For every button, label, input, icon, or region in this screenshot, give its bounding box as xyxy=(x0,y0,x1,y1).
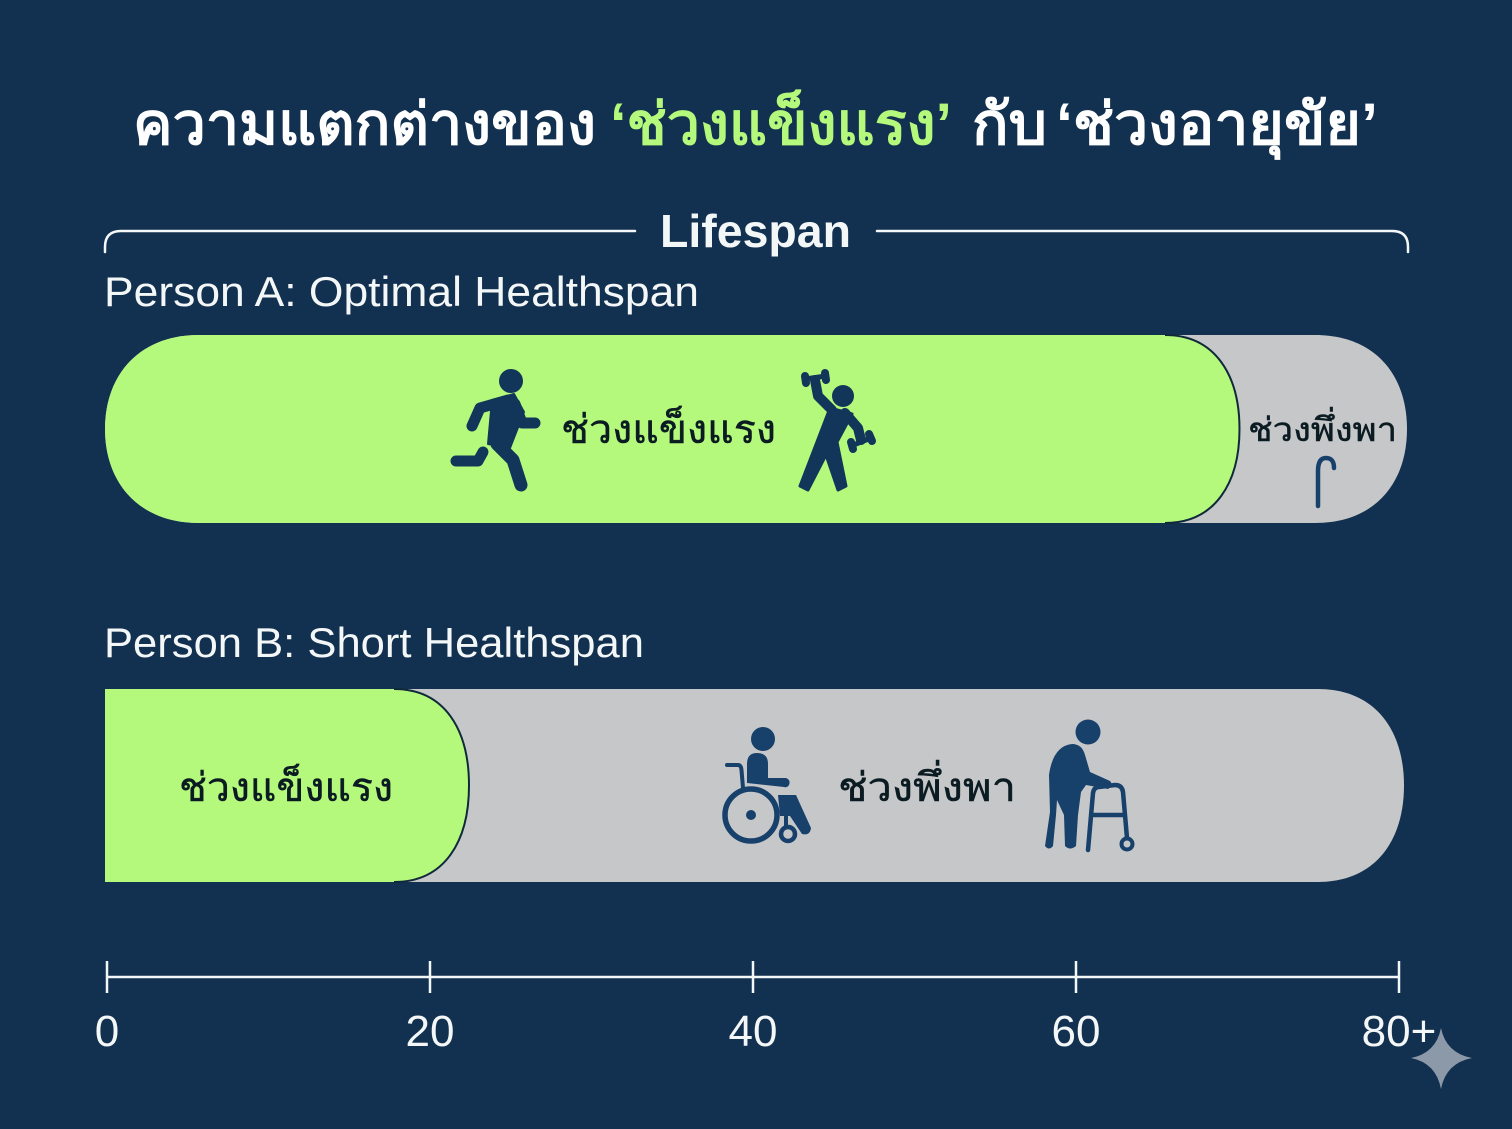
icon: person lifting dumbbells xyxy=(800,373,872,490)
axis label 80+: 80+ xyxy=(1362,1007,1436,1056)
age axis xyxy=(95,961,1436,1056)
panel: person B bar xyxy=(105,689,1404,882)
lifespan bracket: Lifespan xyxy=(660,205,851,257)
title: กับ xyxy=(972,92,1047,157)
icon: sparkle watermark xyxy=(1411,1028,1472,1089)
axis label 20: 20 xyxy=(406,1007,454,1056)
healthspan segment xyxy=(105,335,1240,523)
axis label 40: 40 xyxy=(729,1007,777,1056)
title xyxy=(133,89,1378,161)
icon: person with walker xyxy=(1045,720,1132,850)
label: person A: Person A: Optimal Healthspan xyxy=(104,268,699,315)
healthspan segment xyxy=(105,689,469,882)
axis label 0: 0 xyxy=(95,1007,119,1056)
title: ‘ช่วงแข็งแรง’ xyxy=(610,89,952,157)
icon: wheelchair xyxy=(725,727,811,841)
text: healthspan A: ช่วงแข็งแรง xyxy=(561,405,776,452)
title: ความแตกต่างของ xyxy=(133,92,596,157)
dependent span segment xyxy=(105,689,1404,882)
icon: runner xyxy=(456,369,535,485)
text: dependent span B: ช่วงพึ่งพา xyxy=(838,760,1016,810)
dependent span segment xyxy=(105,335,1407,523)
text: healthspan B: ช่วงแข็งแรง xyxy=(179,763,393,810)
text: dependent span A: ช่วงพึ่งพา xyxy=(1248,407,1397,448)
icon: cane xyxy=(1318,458,1334,506)
label: person B: Person B: Short Healthspan xyxy=(104,619,644,666)
lifespan bracket xyxy=(105,205,1408,257)
title: ‘ช่วงอายุขัย’ xyxy=(1056,92,1378,161)
panel: person A bar xyxy=(105,335,1407,523)
axis label 60: 60 xyxy=(1052,1007,1100,1056)
